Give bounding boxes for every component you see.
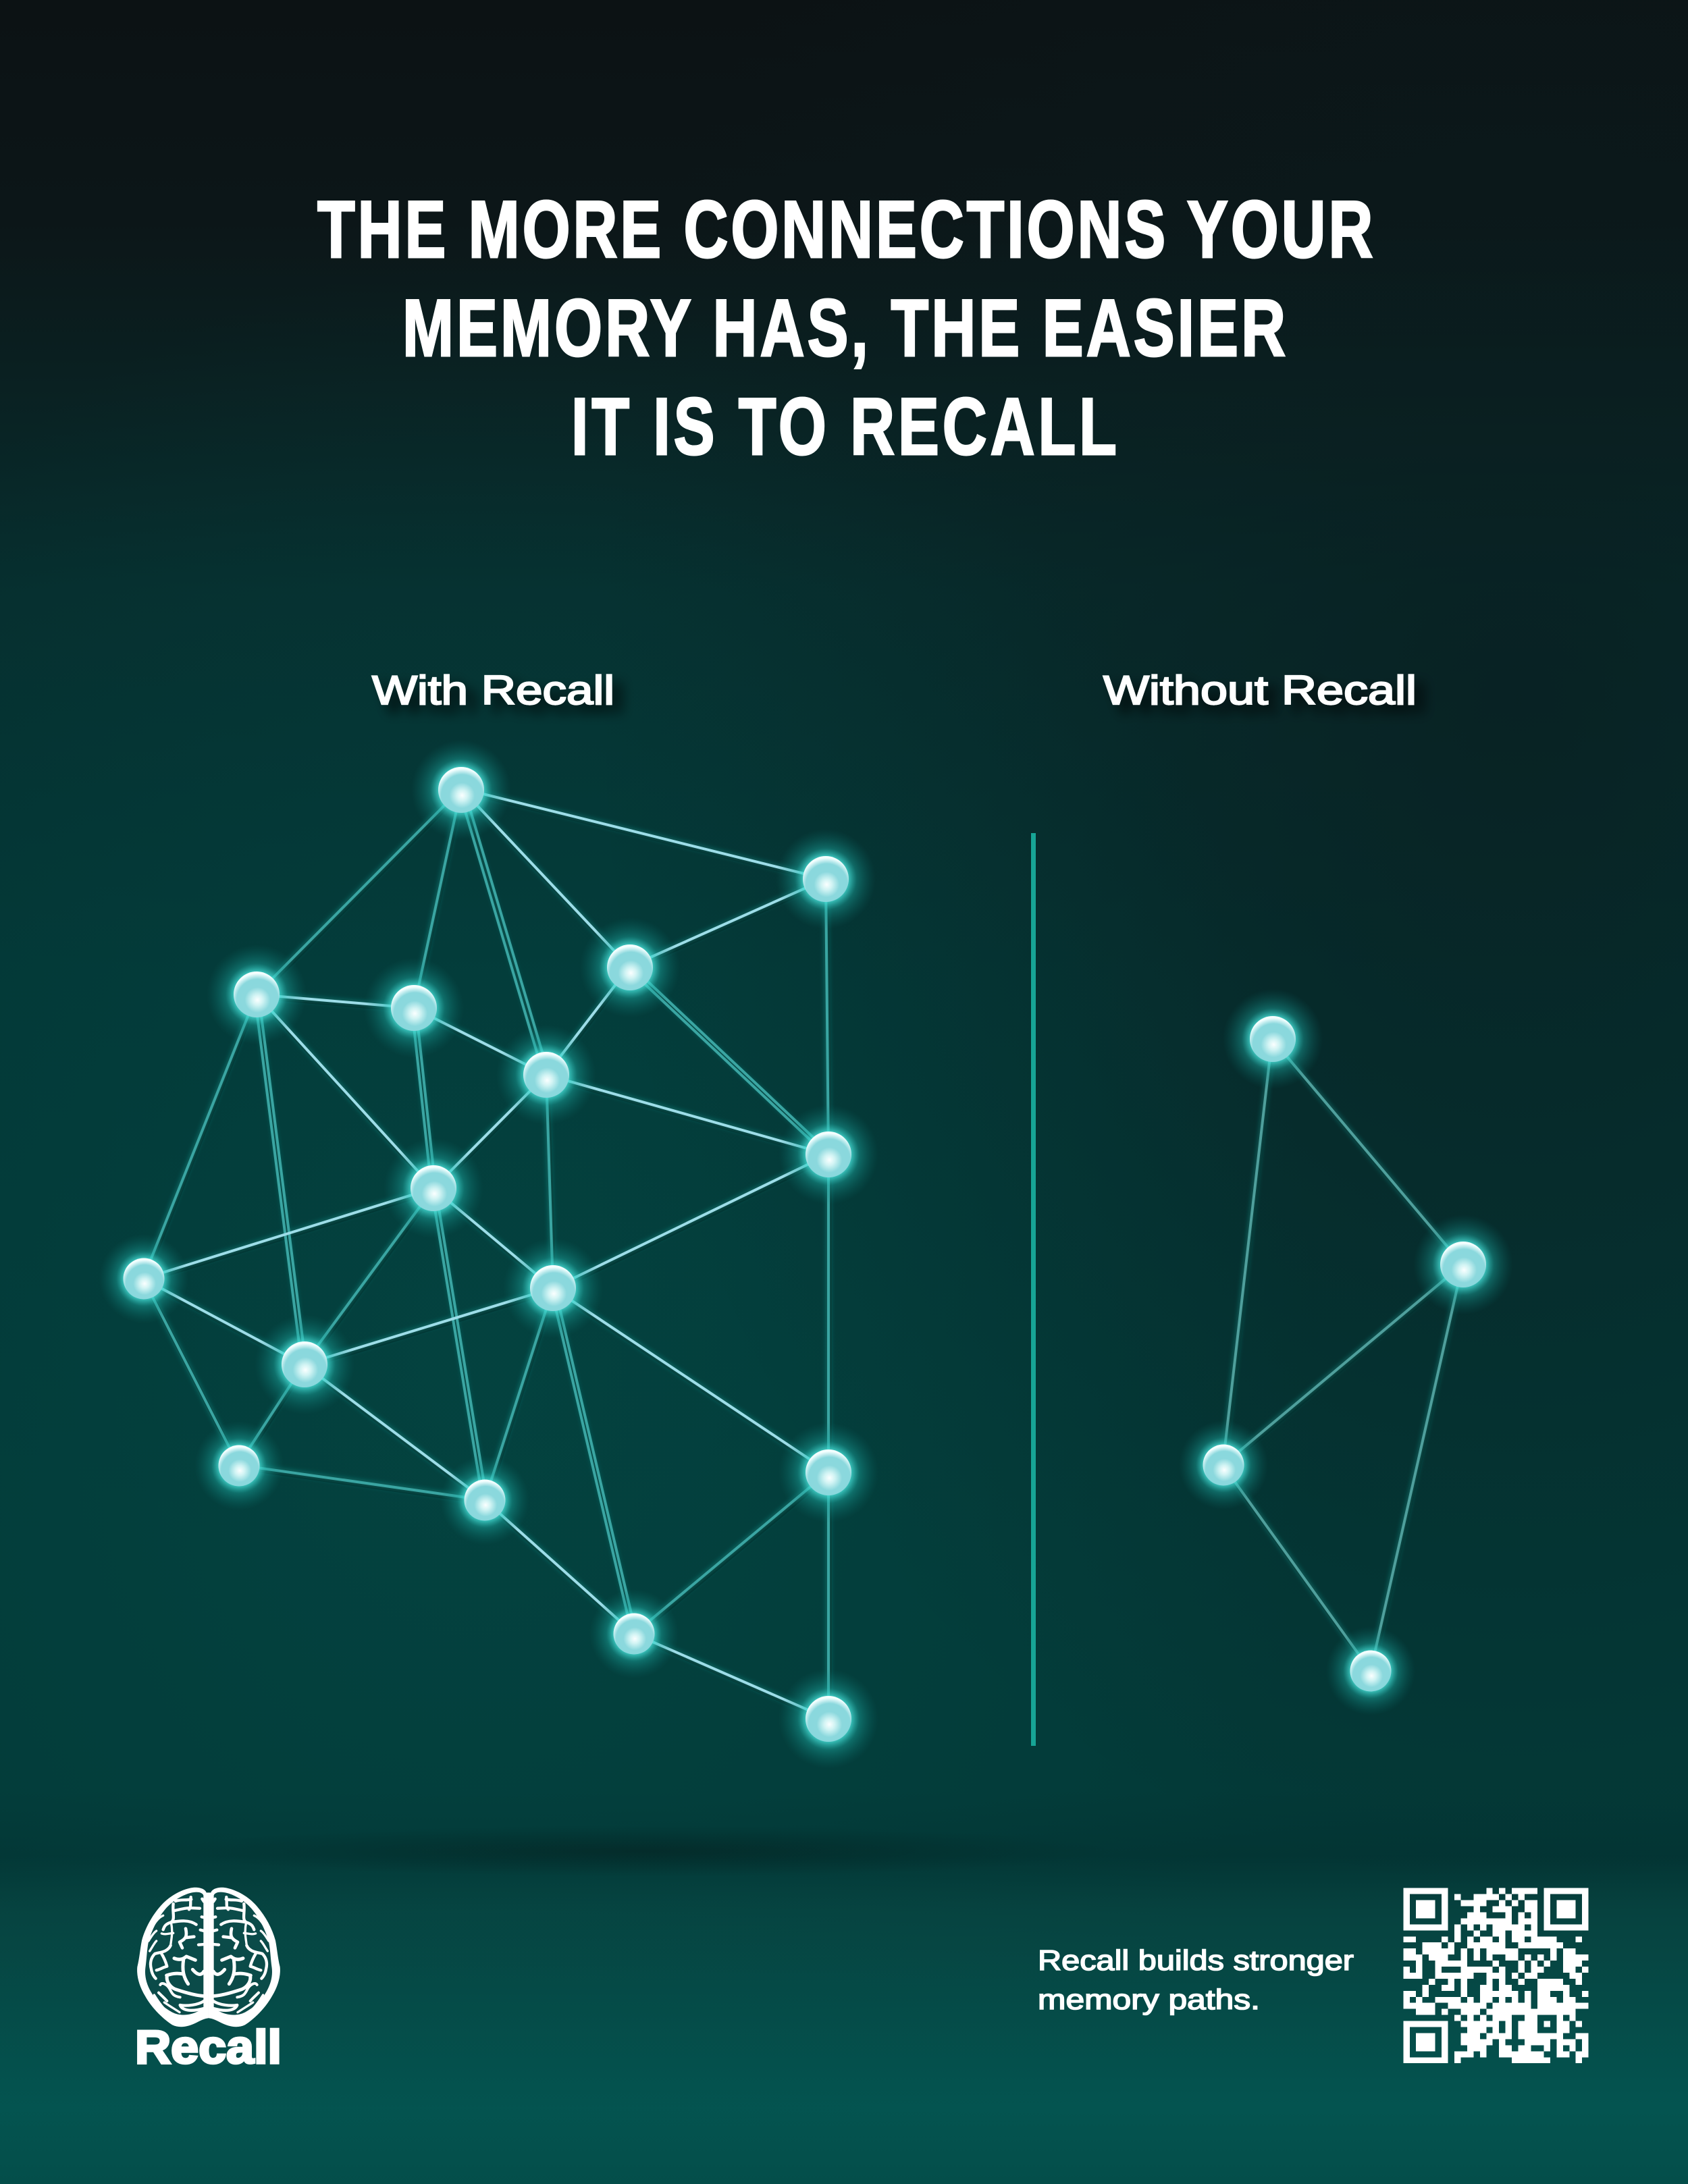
title: IT IS TO RECALL (571, 381, 1117, 472)
node 16 (779, 1669, 878, 1769)
connection lines: dark shadow (144, 791, 830, 1722)
node 1 (411, 740, 511, 840)
node 4 (364, 958, 464, 1058)
node 2 (776, 829, 876, 929)
network: without Recall (1179, 989, 1513, 1715)
node 6 (496, 1025, 596, 1125)
node 11 (255, 1314, 354, 1414)
network: with Recall (99, 740, 878, 1769)
logo (135, 1888, 282, 2073)
node 8 (384, 1138, 483, 1238)
connection lines: dark shadow (1224, 1042, 1464, 1674)
connection lines: bright (143, 789, 828, 1719)
logo wordmark: Recall (135, 2021, 282, 2073)
heading: Without Recall: Without Recall (1103, 668, 1417, 713)
title: THE MORE CONNECTIONS YOUR (317, 184, 1373, 275)
connection lines: teal (143, 789, 830, 1719)
divider (1031, 833, 1036, 1746)
title (317, 184, 1373, 472)
node D (1326, 1626, 1415, 1715)
node 10 (503, 1238, 603, 1338)
tagline (1038, 1944, 1354, 2015)
node 9 (99, 1234, 188, 1323)
node A (1223, 989, 1323, 1089)
title: MEMORY HAS, THE EASIER (402, 283, 1286, 373)
tagline: Recall builds stronger (1038, 1944, 1354, 1976)
node C (1179, 1420, 1268, 1510)
node 14 (779, 1422, 878, 1522)
node 15 (589, 1589, 679, 1678)
connection lines (1223, 1039, 1462, 1671)
connection lines: glow (1223, 1039, 1462, 1671)
heading: With Recall: With Recall (372, 668, 614, 713)
node 3 (207, 944, 307, 1044)
tagline: memory paths. (1038, 1983, 1260, 2015)
icon: brain (137, 1888, 280, 2027)
node 12 (194, 1421, 284, 1510)
node B (1413, 1215, 1513, 1314)
QR code (1403, 1888, 1589, 2063)
node 13 (440, 1456, 529, 1545)
node 7 (779, 1104, 878, 1204)
node 5 (580, 917, 680, 1017)
connection lines: glow (143, 789, 828, 1719)
